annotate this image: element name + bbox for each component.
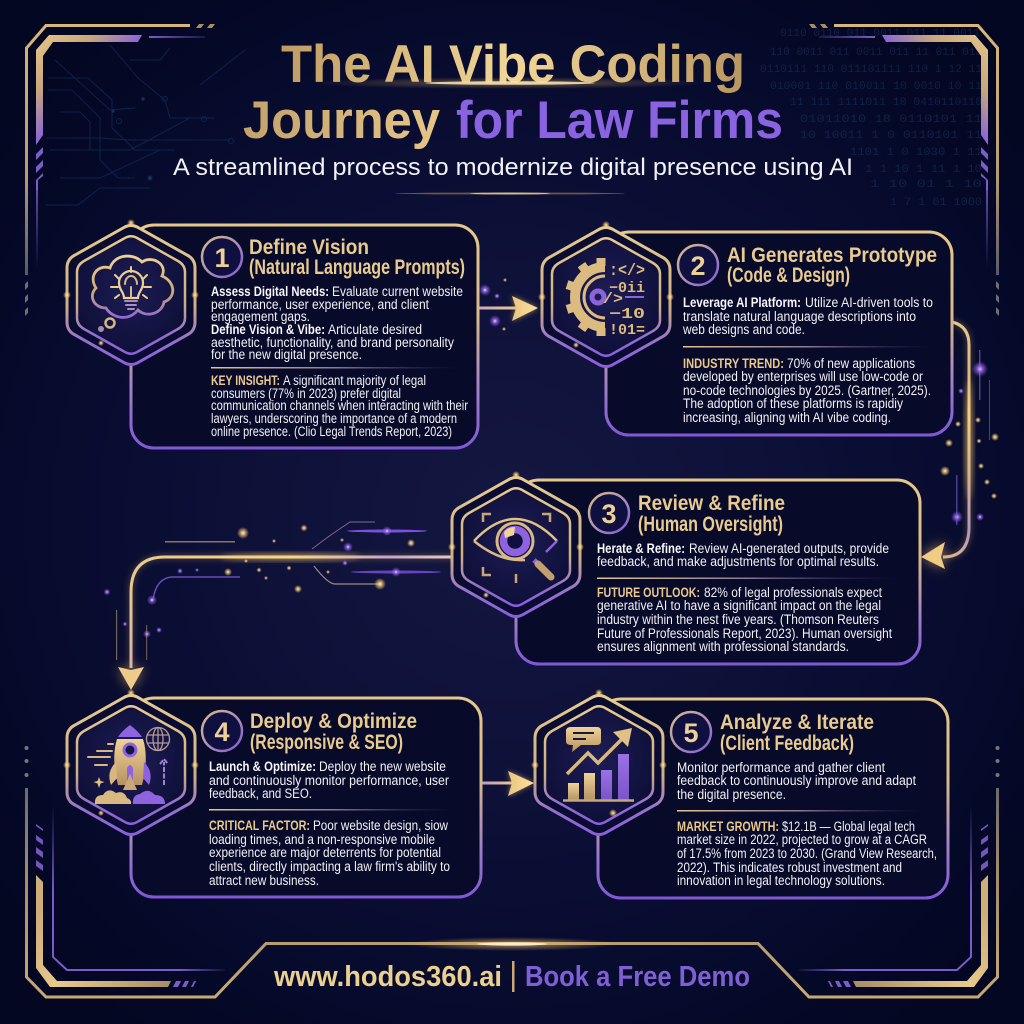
icon: gear with code: :</> [609,262,645,281]
panel: step 3 review and refine [448,471,920,664]
panel 1 key insight [211,373,468,439]
panel 4 heading [250,710,417,754]
panel 4 critical factor: attract new business. [209,873,319,888]
panel 2 hexagon badge [538,221,674,366]
subtitle divider glow [395,192,625,194]
panel 2 description: Utilize AI-driven tools to [805,295,933,310]
panel 1 key insight: A significant majority of legal [283,373,426,388]
panel 5 heading: Analyze & Iterate [720,711,874,734]
panel 1 description: Define Vision & Vibe: [211,322,325,337]
panel 1 description [211,284,463,362]
panel 4 description [209,759,449,801]
panel 4 critical factor [209,818,450,888]
panel 1 description: engagement gaps. [211,309,310,324]
binary code pattern top right: 1 1 10 1 11 1 10 [865,164,982,176]
arrow: step 2 to step 3 [921,322,999,569]
panel 4 critical factor: clients, directly impacting a law firm's ability to [209,859,450,874]
panel 5 market growth: MARKET GROWTH: [677,819,779,834]
panel 3 future outlook: industry within the nest five years. (Thomson Reuters [597,612,879,627]
icon: gear with code [567,258,645,339]
panel 4 description: Deploy the new website [319,759,446,774]
panel 1 description: performance, user experience, and client [211,297,429,312]
panel 1 heading [249,236,465,279]
panel 5 market growth: innovation in legal technology solutions. [677,873,885,888]
footer call to action [273,961,750,993]
panel 5 number: 5 [683,718,699,748]
panel 3 future outlook: ensures alignment with professional standards. [597,639,849,654]
panel 5 market growth: $12.1B — Global legal tech [782,819,915,834]
panel 5 heading [720,711,874,755]
panel 3 number: 3 [601,499,617,529]
binary code pattern top right: 1 7 1 01 1000 [890,197,982,209]
footer glow [407,937,617,951]
panel 4 critical factor: CRITICAL FACTOR: [209,818,310,833]
icon: gear with code: !01= [609,322,645,339]
panel 2 description: Leverage AI Platform: [683,295,801,310]
panel 3 description: Review AI-generated outputs, provide [689,541,889,556]
panel 1 hexagon badge [63,219,199,364]
panel 2 number [678,245,718,285]
panel 5 card [598,699,948,898]
panel 3 heading [638,492,785,536]
panel 5 description: the digital presence. [677,787,786,802]
binary code pattern top right: 01011010 18 0110101 11 [800,114,982,126]
panel 5 market growth: market size in 2022, projected to grow at a CAGR [677,832,927,847]
subtitle: A streamlined process to modernize digital presence using AI [173,154,853,181]
panel 2 description [682,295,933,337]
panel 1 heading: (Natural Language Prompts) [249,256,465,279]
panel 1 description: for the new digital presence. [211,347,362,362]
binary code pattern top right: 0110111 110 011101111 110 1 12 11 [760,64,982,76]
panel 2 industry trend: no-code technologies by 2025. (Gartner, 2025). [683,383,931,398]
panel 4 heading: Deploy & Optimize [250,710,417,733]
panel 4 number: 4 [214,717,230,747]
panel 2 industry trend [683,356,931,425]
panel 2 number: 2 [690,251,706,281]
panel 4 critical factor: loading times, and a non-responsive mobile [209,832,435,847]
arrow: step 1 to step 2 [478,278,538,331]
panel 2 card [606,232,952,435]
panel 4 number [202,711,242,751]
panel 3 future outlook [597,585,892,654]
binary code pattern top right: 1 10 01 1 10 [870,179,982,191]
panel 3 hexagon badge [448,471,584,616]
panel 3 future outlook: 82% of legal professionals expect [704,585,882,600]
panel 5 description: feedback to continuously improve and adapt [677,773,916,788]
panel 2 description: web designs and code. [682,322,805,337]
icon: gear with code: /> [603,291,623,308]
panel: step 1 define vision [63,219,478,448]
panel 2 industry trend: developed by enterprises will use low-code or [683,369,923,384]
panel 5 heading: (Client Feedback) [720,732,854,755]
panel 2 heading: (Code & Design) [727,264,850,287]
binary code pattern top right [760,28,982,209]
panel 2 industry trend: 70% of new applications [787,356,915,371]
arrow: step 3 to step 4 [104,522,453,690]
panel 5 market growth: of 17.5% from 2023 to 2030. (Grand View Research, [677,846,937,861]
binary code pattern top right: 010001 110 010011 10 0010 10 11 [770,81,982,93]
panel 1 number [202,237,242,277]
panel 1 key insight: lawyers, underscoring the importance of a modern [211,411,457,426]
panel: step 5 analyze and iterate [531,689,948,898]
panel 4 hexagon badge [63,689,199,834]
binary code pattern top right: 10 10011 1 0 0110101 11 [800,130,982,142]
panel 1 key insight: consumers (77% in 2023) prefer digital [211,386,401,401]
panel: step 2 AI generates prototype [538,221,952,435]
panel 3 future outlook: FUTURE OUTLOOK: [597,585,700,600]
panel 3 heading: (Human Oversight) [638,513,783,536]
panel 5 description [677,760,916,802]
title: for Law Firms [456,91,783,150]
panel 2 industry trend: INDUSTRY TREND: [683,356,784,371]
arrow: step 4 to step 5 [481,771,534,796]
panel 1 description: Assess Digital Needs: [211,284,329,299]
panel 1 card [131,225,478,448]
decorative frame: right half [512,24,1000,997]
icon: gear with code: −10 [609,306,645,323]
title [243,35,783,150]
panel 1 description: Articulate desired [328,322,422,337]
panel 5 description: Monitor performance and gather client [677,760,885,775]
panel 2 heading: AI Generates Prototype [727,244,937,267]
panel 5 market growth: 2022). This indicates robust investment and [677,860,902,875]
panel 3 card [516,480,920,664]
panel 1 key insight: communication channels when interacting with their [211,398,468,413]
panel 4 critical factor: experience are major deterrents for potential [209,845,441,860]
panel 4 critical factor: Poor website design, siow [313,818,448,833]
panel 2 heading [727,244,937,287]
panel 3 description: feedback, and make adjustments for optimal results. [597,554,879,569]
icon: eye with magnifying glass [474,514,557,583]
panel 5 number [671,712,711,752]
panel 1 key insight: online presence. (Clio Legal Trends Report, 2023) [211,424,452,439]
decorative frame: left half [24,24,512,997]
panel 2 industry trend: increasing, aligning with AI vibe coding. [683,410,891,425]
footer call to action: Book a Free Demo [525,961,750,993]
panel 1 heading: Define Vision [249,236,369,259]
icon: thought cloud with lightbulb [92,256,173,332]
panel: step 4 deploy and optimize [63,689,481,897]
binary code pattern top right: 110 0011 011 0011 011 11 011 013 [770,47,982,59]
panel 4 description: Launch & Optimize: [209,759,316,774]
panel 1 description: aesthetic, functionality, and brand personality [211,335,454,350]
panel 3 description [597,541,889,569]
panel 2 description: translate natural language descriptions into [683,309,916,324]
icon: rocket launch with globe [88,725,170,804]
panel 3 future outlook: Future of Professionals Report, 2023). Human oversight [597,626,892,641]
icon: gear with code: −0ii [609,280,645,297]
panel 3 description: Herate & Refine: [597,541,685,556]
circuit pattern top left [45,45,245,205]
title: The AI Vibe Coding [281,35,745,94]
panel 3 number [589,493,629,533]
footer call to action: www.hodos360.ai [273,961,502,993]
panel 5 market growth [677,819,937,888]
panel 4 card [131,698,481,897]
panel 2 industry trend: The adoption of these platforms is rapidiy [683,396,903,411]
icon: growth chart with speech bubble [563,727,634,800]
panel 4 description: and continuously monitor performance, user [209,773,449,788]
panel 5 hexagon badge [531,689,667,834]
panel 1 description: Evaluate current website [332,284,463,299]
binary code pattern top right: 11 111 1111011 10 0410110110 [790,97,982,109]
panel 3 heading: Review & Refine [638,492,785,515]
binary code pattern top right: 0110 0110 011 0011 011 11 0011 [780,28,980,40]
panel 4 heading: (Responsive & SEO) [250,731,403,754]
panel 3 future outlook: generative AI to have a significant impact on the legal [597,598,881,613]
panel 4 description: feedback, and SEO. [209,786,312,801]
panel 1 key insight: KEY INSIGHT: [211,373,280,388]
title: Journey [243,91,440,150]
panel 1 number: 1 [214,243,230,273]
binary code pattern top right: 1101 1 0 1030 1 11 [850,147,982,159]
